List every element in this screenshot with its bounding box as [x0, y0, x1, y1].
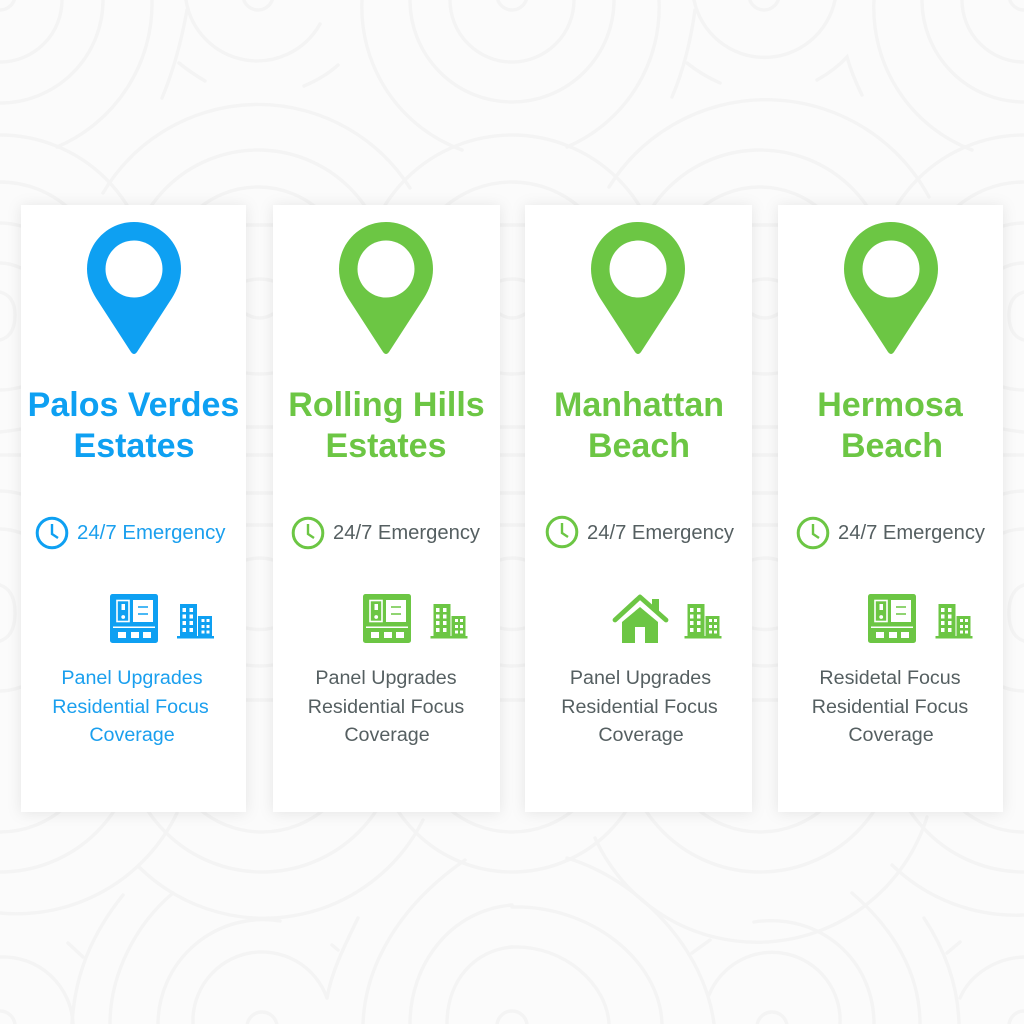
- icon: office building: [684, 604, 722, 638]
- heading: Manhattan Beach: Manhattan: [554, 386, 724, 424]
- heading: Hermosa Beach: Beach: [841, 427, 943, 465]
- heading: Palos Verdes Estates: Estates: [74, 427, 194, 465]
- heading: Hermosa Beach: Hermosa: [817, 386, 964, 424]
- heading: Palos Verdes Estates: Palos Verdes: [28, 386, 239, 424]
- text: services list: Residential Focus: [812, 696, 968, 718]
- icon: clock: [798, 518, 828, 548]
- heading: Manhattan Beach: Beach: [588, 427, 690, 465]
- icon: electrical panel: [868, 594, 916, 643]
- card: Rolling Hills Estates: [273, 205, 500, 812]
- text: services list: Residential Focus: [561, 696, 718, 718]
- card: Manhattan Beach: [525, 205, 752, 812]
- icon: electrical panel: [110, 594, 158, 643]
- text: 24/7 Emergency: 24/7 Emergency: [838, 522, 986, 544]
- text: services list: Coverage: [848, 724, 934, 746]
- text: services list: Coverage: [344, 724, 430, 746]
- card: Palos Verdes Estates: [21, 205, 246, 812]
- icon: clock: [293, 518, 323, 548]
- text: services list: Panel Upgrades: [570, 667, 711, 689]
- text: services list: Residential Focus: [308, 696, 464, 718]
- icon: house: [615, 597, 666, 643]
- card: Hermosa Beach: [778, 205, 1003, 812]
- text: services list: Panel Upgrades: [61, 667, 203, 689]
- icon: office building: [430, 604, 468, 638]
- icon: office building: [177, 604, 214, 638]
- text: services list: Panel Upgrades: [315, 667, 457, 689]
- text: services list: Coverage: [598, 724, 684, 746]
- icon: green location pin: [844, 222, 938, 354]
- text: 24/7 Emergency: 24/7 Emergency: [587, 522, 735, 544]
- icon: clock: [547, 517, 577, 547]
- heading: Rolling Hills Estates: Estates: [326, 427, 446, 465]
- text: services list: Residential Focus: [52, 696, 209, 718]
- text: services list: Coverage: [89, 724, 175, 746]
- icon: green location pin: [339, 222, 433, 354]
- text: 24/7 Emergency: 24/7 Emergency: [77, 522, 226, 544]
- icon: blue location pin: [87, 222, 181, 354]
- icon: office building: [936, 604, 972, 638]
- icon: green location pin: [591, 222, 685, 354]
- text: services list: Residetal Focus: [819, 667, 961, 689]
- icon: clock: [37, 518, 67, 548]
- text: 24/7 Emergency: 24/7 Emergency: [333, 522, 481, 544]
- icon: electrical panel: [363, 594, 411, 643]
- heading: Rolling Hills Estates: Rolling Hills: [288, 386, 485, 424]
